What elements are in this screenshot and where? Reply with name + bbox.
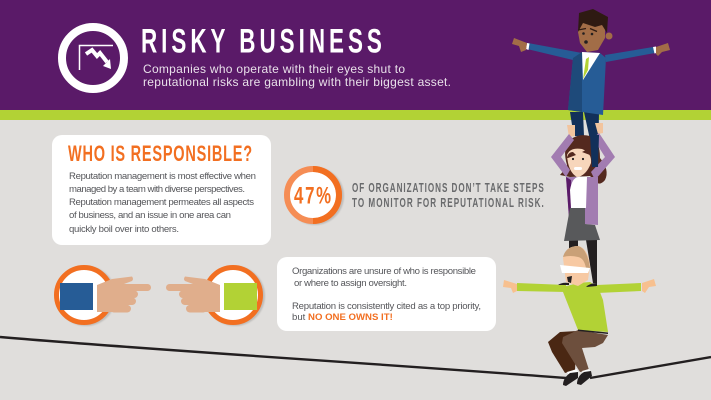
arms [527, 43, 582, 60]
hands [512, 38, 527, 52]
stat text: TO MONITOR FOR REPUTATIONAL RISK. [352, 196, 544, 211]
hands [503, 280, 517, 293]
figure: man in suit [512, 9, 670, 167]
note text [292, 266, 481, 323]
figure: woman's legs [569, 240, 597, 283]
blindfold [560, 265, 590, 273]
face [582, 32, 585, 35]
icon: falling chart in circle [62, 27, 124, 89]
shoes [563, 372, 578, 386]
body text: of business, and an issue in one area can [69, 210, 231, 221]
stat: 47 percent ring: 47% [294, 183, 331, 209]
hands [567, 125, 575, 137]
lime stripe [0, 110, 711, 120]
subtitle: reputational risks are gambling with their biggest asset. [143, 75, 451, 89]
body text: managed by a team with diverse perspectives. [69, 184, 245, 195]
body text [69, 171, 256, 235]
shirt and tie [582, 52, 600, 80]
woman's shoes [558, 283, 597, 287]
head [578, 22, 605, 52]
stat: 47 percent ring [286, 166, 344, 225]
subtitle [143, 62, 451, 89]
belt [578, 330, 608, 334]
title: RISKY BUSINESS [141, 23, 382, 61]
jacket [568, 52, 606, 115]
heading: WHO IS RESPONSIBLE? [68, 141, 252, 166]
stat text: OF ORGANIZATIONS DON’T TAKE STEPS [352, 181, 544, 196]
stat text [352, 181, 544, 211]
header band [0, 0, 711, 110]
head [563, 246, 590, 286]
body text: Reputation management is most effective when [69, 171, 256, 182]
icon: left pointing hand [56, 266, 151, 326]
note text: Reputation is consistently cited as a top priority, [292, 301, 481, 312]
body text: quickly boil over into others. [69, 224, 179, 235]
face [567, 149, 591, 177]
tightrope [0, 337, 711, 378]
panel: who is responsible [52, 135, 271, 245]
skirt [564, 208, 600, 241]
trousers [570, 112, 584, 136]
figure: blindfolded man [503, 246, 656, 386]
body text: Reputation management permeates all aspects [69, 197, 254, 208]
note text: or where to assign oversight. [294, 278, 407, 289]
light trouser leg [562, 330, 608, 372]
arms [517, 283, 566, 292]
mouth [567, 276, 572, 283]
hair [578, 9, 608, 33]
subtitle: Companies who operate with their eyes shut to [143, 62, 405, 76]
socks [567, 369, 591, 375]
note text: but NO ONE OWNS IT! [292, 312, 393, 323]
panel: ownership note [277, 257, 496, 331]
ear [606, 32, 612, 40]
figure: woman [551, 123, 615, 241]
dark trouser leg [548, 331, 577, 373]
shirt [563, 282, 608, 332]
note text: Organizations are unsure of who is responsible [292, 266, 476, 277]
hair [560, 135, 607, 184]
icon: right pointing hand [166, 266, 265, 326]
head hair [563, 246, 590, 268]
cardigan and arms [551, 134, 574, 177]
trouser over hair [590, 135, 599, 167]
